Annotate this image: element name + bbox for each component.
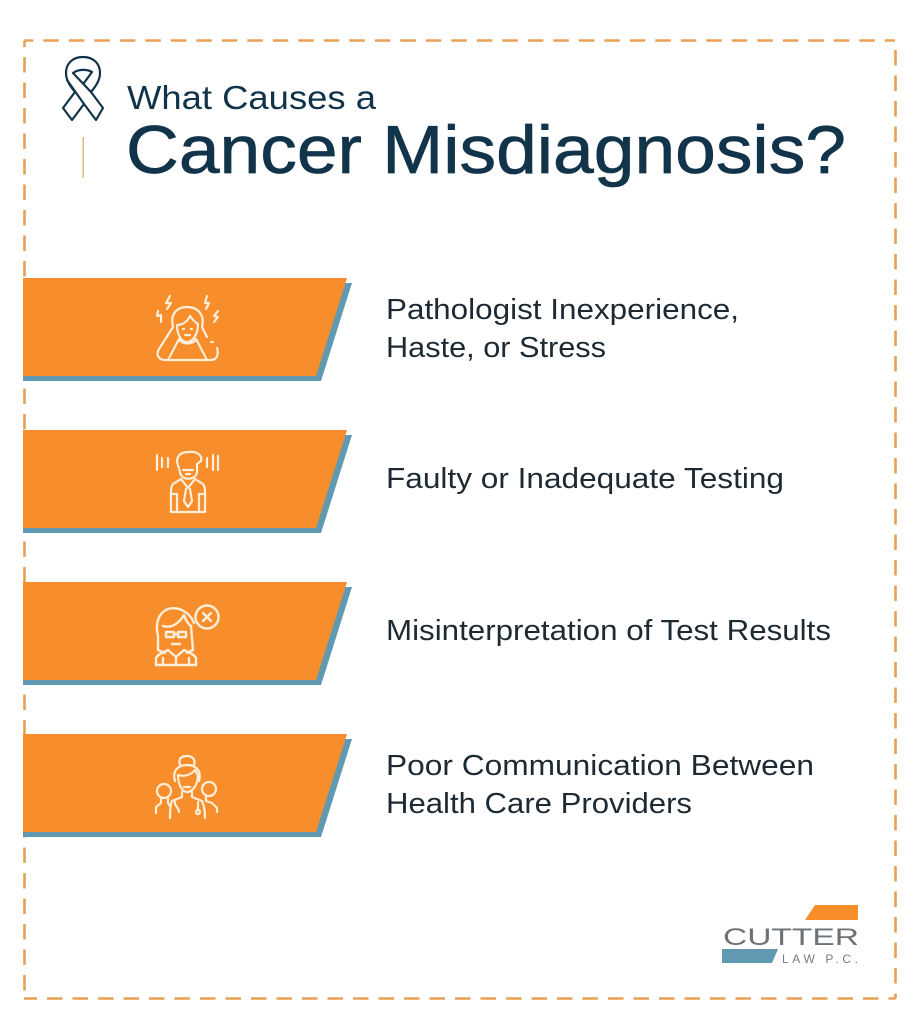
panel: cause 4 — [23, 734, 814, 837]
logo orange shape — [805, 905, 858, 920]
panel: cause 2 — [23, 430, 784, 533]
text: Misinterpretation of Test Results — [386, 615, 831, 647]
banner — [23, 278, 347, 376]
text: Poor Communication Between — [386, 750, 814, 782]
banner shadow — [23, 739, 352, 837]
icon: stressed person holding head — [157, 296, 218, 360]
icon: awareness ribbon — [63, 57, 103, 120]
banner — [23, 582, 347, 680]
icon: woman with glasses and error bubble — [156, 606, 218, 665]
banner shadow — [23, 587, 352, 685]
text: Haste, or Stress — [386, 332, 606, 364]
banner — [23, 430, 347, 528]
logo: Cutter Law P.C. — [722, 905, 859, 966]
banner shadow — [23, 435, 352, 533]
logo blue shape — [722, 949, 778, 963]
heading — [126, 79, 846, 188]
icon: group of care providers — [156, 756, 217, 818]
text: Faulty or Inadequate Testing — [386, 463, 784, 495]
text: Health Care Providers — [386, 788, 692, 820]
panel: cause 3 — [23, 582, 831, 685]
heading line 1: What Causes a — [127, 79, 377, 116]
icon: shaking man with tie — [157, 452, 218, 512]
banner shadow — [23, 283, 352, 381]
text — [386, 294, 739, 364]
accent line under ribbon — [82, 137, 84, 178]
banner — [23, 734, 347, 832]
heading line 2: Cancer Misdiagnosis? — [126, 112, 846, 188]
logo wordmark: CUTTER — [723, 924, 859, 951]
panel: cause 1 — [23, 278, 739, 381]
text: Pathologist Inexperience, — [386, 294, 739, 326]
logo subtitle: LAW P.C. — [782, 952, 858, 966]
text — [386, 750, 814, 820]
